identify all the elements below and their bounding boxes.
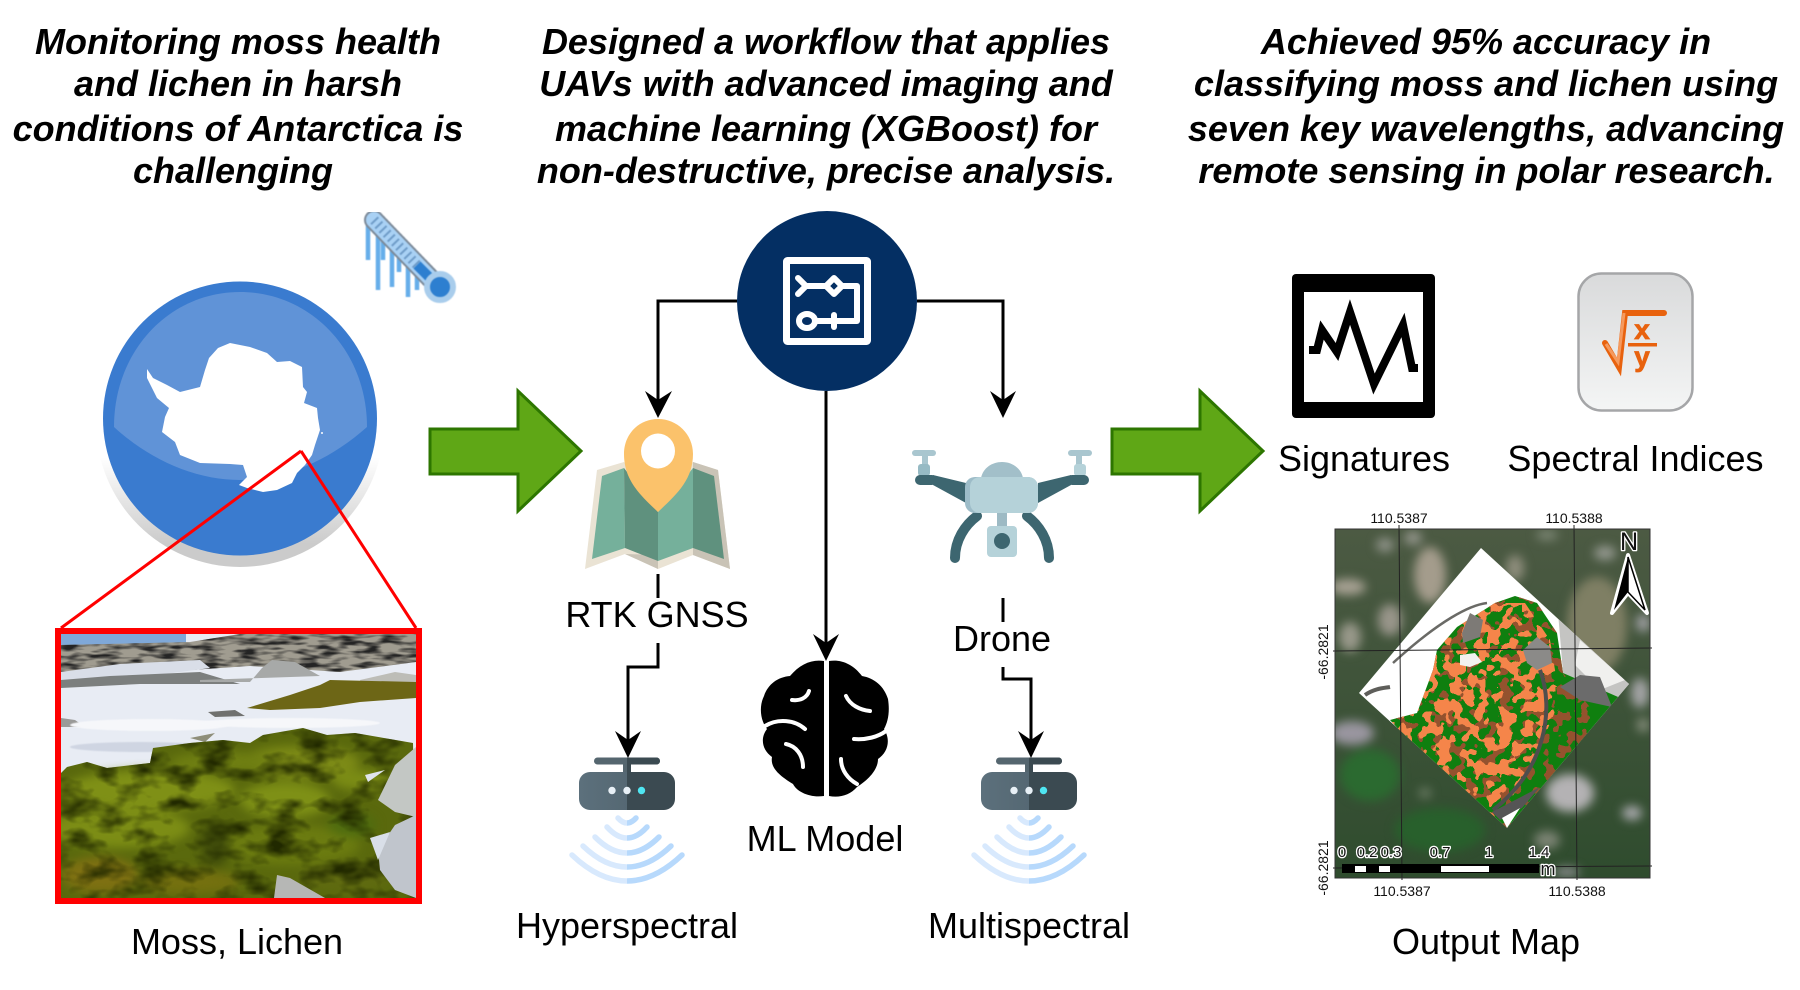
map scale bar: 0.2 [1357, 844, 1377, 861]
label: Moss, Lichen: Moss, Lichen [131, 921, 343, 962]
map coordinate labels: 110.5387 [1370, 510, 1428, 526]
heading: result: remote sensing in polar research. [1198, 150, 1775, 191]
map coordinate labels: -66.2821 [1315, 840, 1331, 896]
heading: challenge: and lichen in harsh [74, 63, 402, 104]
map coordinate labels: 110.5388 [1545, 510, 1603, 526]
map north arrow: N [1620, 528, 1638, 556]
label: Drone: Drone [953, 618, 1051, 659]
icon: brain [761, 661, 889, 797]
arrow: workflow to ML model [813, 391, 839, 661]
heading: method [537, 21, 1115, 191]
heading: method: UAVs with advanced imaging and [539, 63, 1114, 104]
icon: spectral indices formula: x [1634, 314, 1650, 345]
label: Signatures: Signatures [1278, 438, 1450, 479]
arrow: RTK GNSS to hyperspectral [615, 574, 658, 758]
icon: drone [912, 450, 1092, 558]
icon: multispectral sensor [974, 758, 1084, 881]
heading: result [1188, 21, 1784, 191]
heading: result: classifying moss and lichen using [1194, 63, 1778, 104]
heading: challenge: conditions of Antarctica is [13, 108, 463, 149]
heading: method: non-destructive, precise analysis. [537, 150, 1115, 191]
icon: cold thermometer [368, 220, 453, 300]
heading: method: Designed a workflow that applies [542, 21, 1110, 62]
map scale bar [1338, 844, 1556, 879]
map scale bar: 0.7 [1430, 844, 1450, 861]
arrow: workflow to RTK GNSS [645, 301, 737, 418]
icon: spectral signature [1292, 274, 1435, 418]
label: Output Map: Output Map [1392, 921, 1580, 962]
map coordinate labels: 110.5387 [1373, 883, 1431, 899]
heading: challenge [13, 21, 463, 191]
map coordinate labels: 110.5388 [1548, 883, 1606, 899]
arrow: drone to multispectral [1003, 598, 1044, 758]
icon: spectral indices formula [1578, 274, 1692, 410]
heading: method: machine learning (XGBoost) for [555, 108, 1099, 149]
label: ML Model: ML Model [747, 818, 903, 859]
icon: spectral indices formula: y [1634, 341, 1650, 372]
icon: Antarctica globe [96, 279, 384, 567]
arrow: method to results [1112, 391, 1263, 511]
map scale bar: 1 [1485, 844, 1493, 861]
label: Hyperspectral: Hyperspectral [516, 905, 738, 946]
label: Spectral Indices: Spectral Indices [1507, 438, 1764, 479]
label: Multispectral: Multispectral [928, 905, 1130, 946]
heading: result: seven key wavelengths, advancing [1188, 108, 1784, 149]
heading: challenge: Monitoring moss health [35, 21, 441, 62]
icon: workflow circle [737, 211, 917, 391]
photo: moss and lichen [50, 631, 419, 901]
icon: map with pin [585, 419, 730, 569]
callout lines: zoom from Antarctica to photo [61, 451, 416, 628]
arrow: challenge to method [430, 391, 581, 511]
heading: challenge: challenging [133, 150, 333, 191]
map scale bar: 0 [1338, 844, 1346, 861]
arrow: workflow to drone [917, 301, 1016, 418]
map coordinate labels: -66.2821 [1315, 624, 1331, 680]
map: classified output [1315, 510, 1652, 899]
map north arrow [1612, 528, 1647, 613]
icon: hyperspectral sensor [572, 758, 682, 881]
map coordinate labels [1315, 510, 1606, 899]
map scale bar: 0.3 [1381, 844, 1401, 861]
map scale bar: m [1540, 859, 1556, 879]
label: RTK GNSS: RTK GNSS [565, 594, 749, 635]
map scale bar: 1.4 [1529, 844, 1549, 861]
heading: result: Achieved 95% accuracy in [1260, 21, 1711, 62]
